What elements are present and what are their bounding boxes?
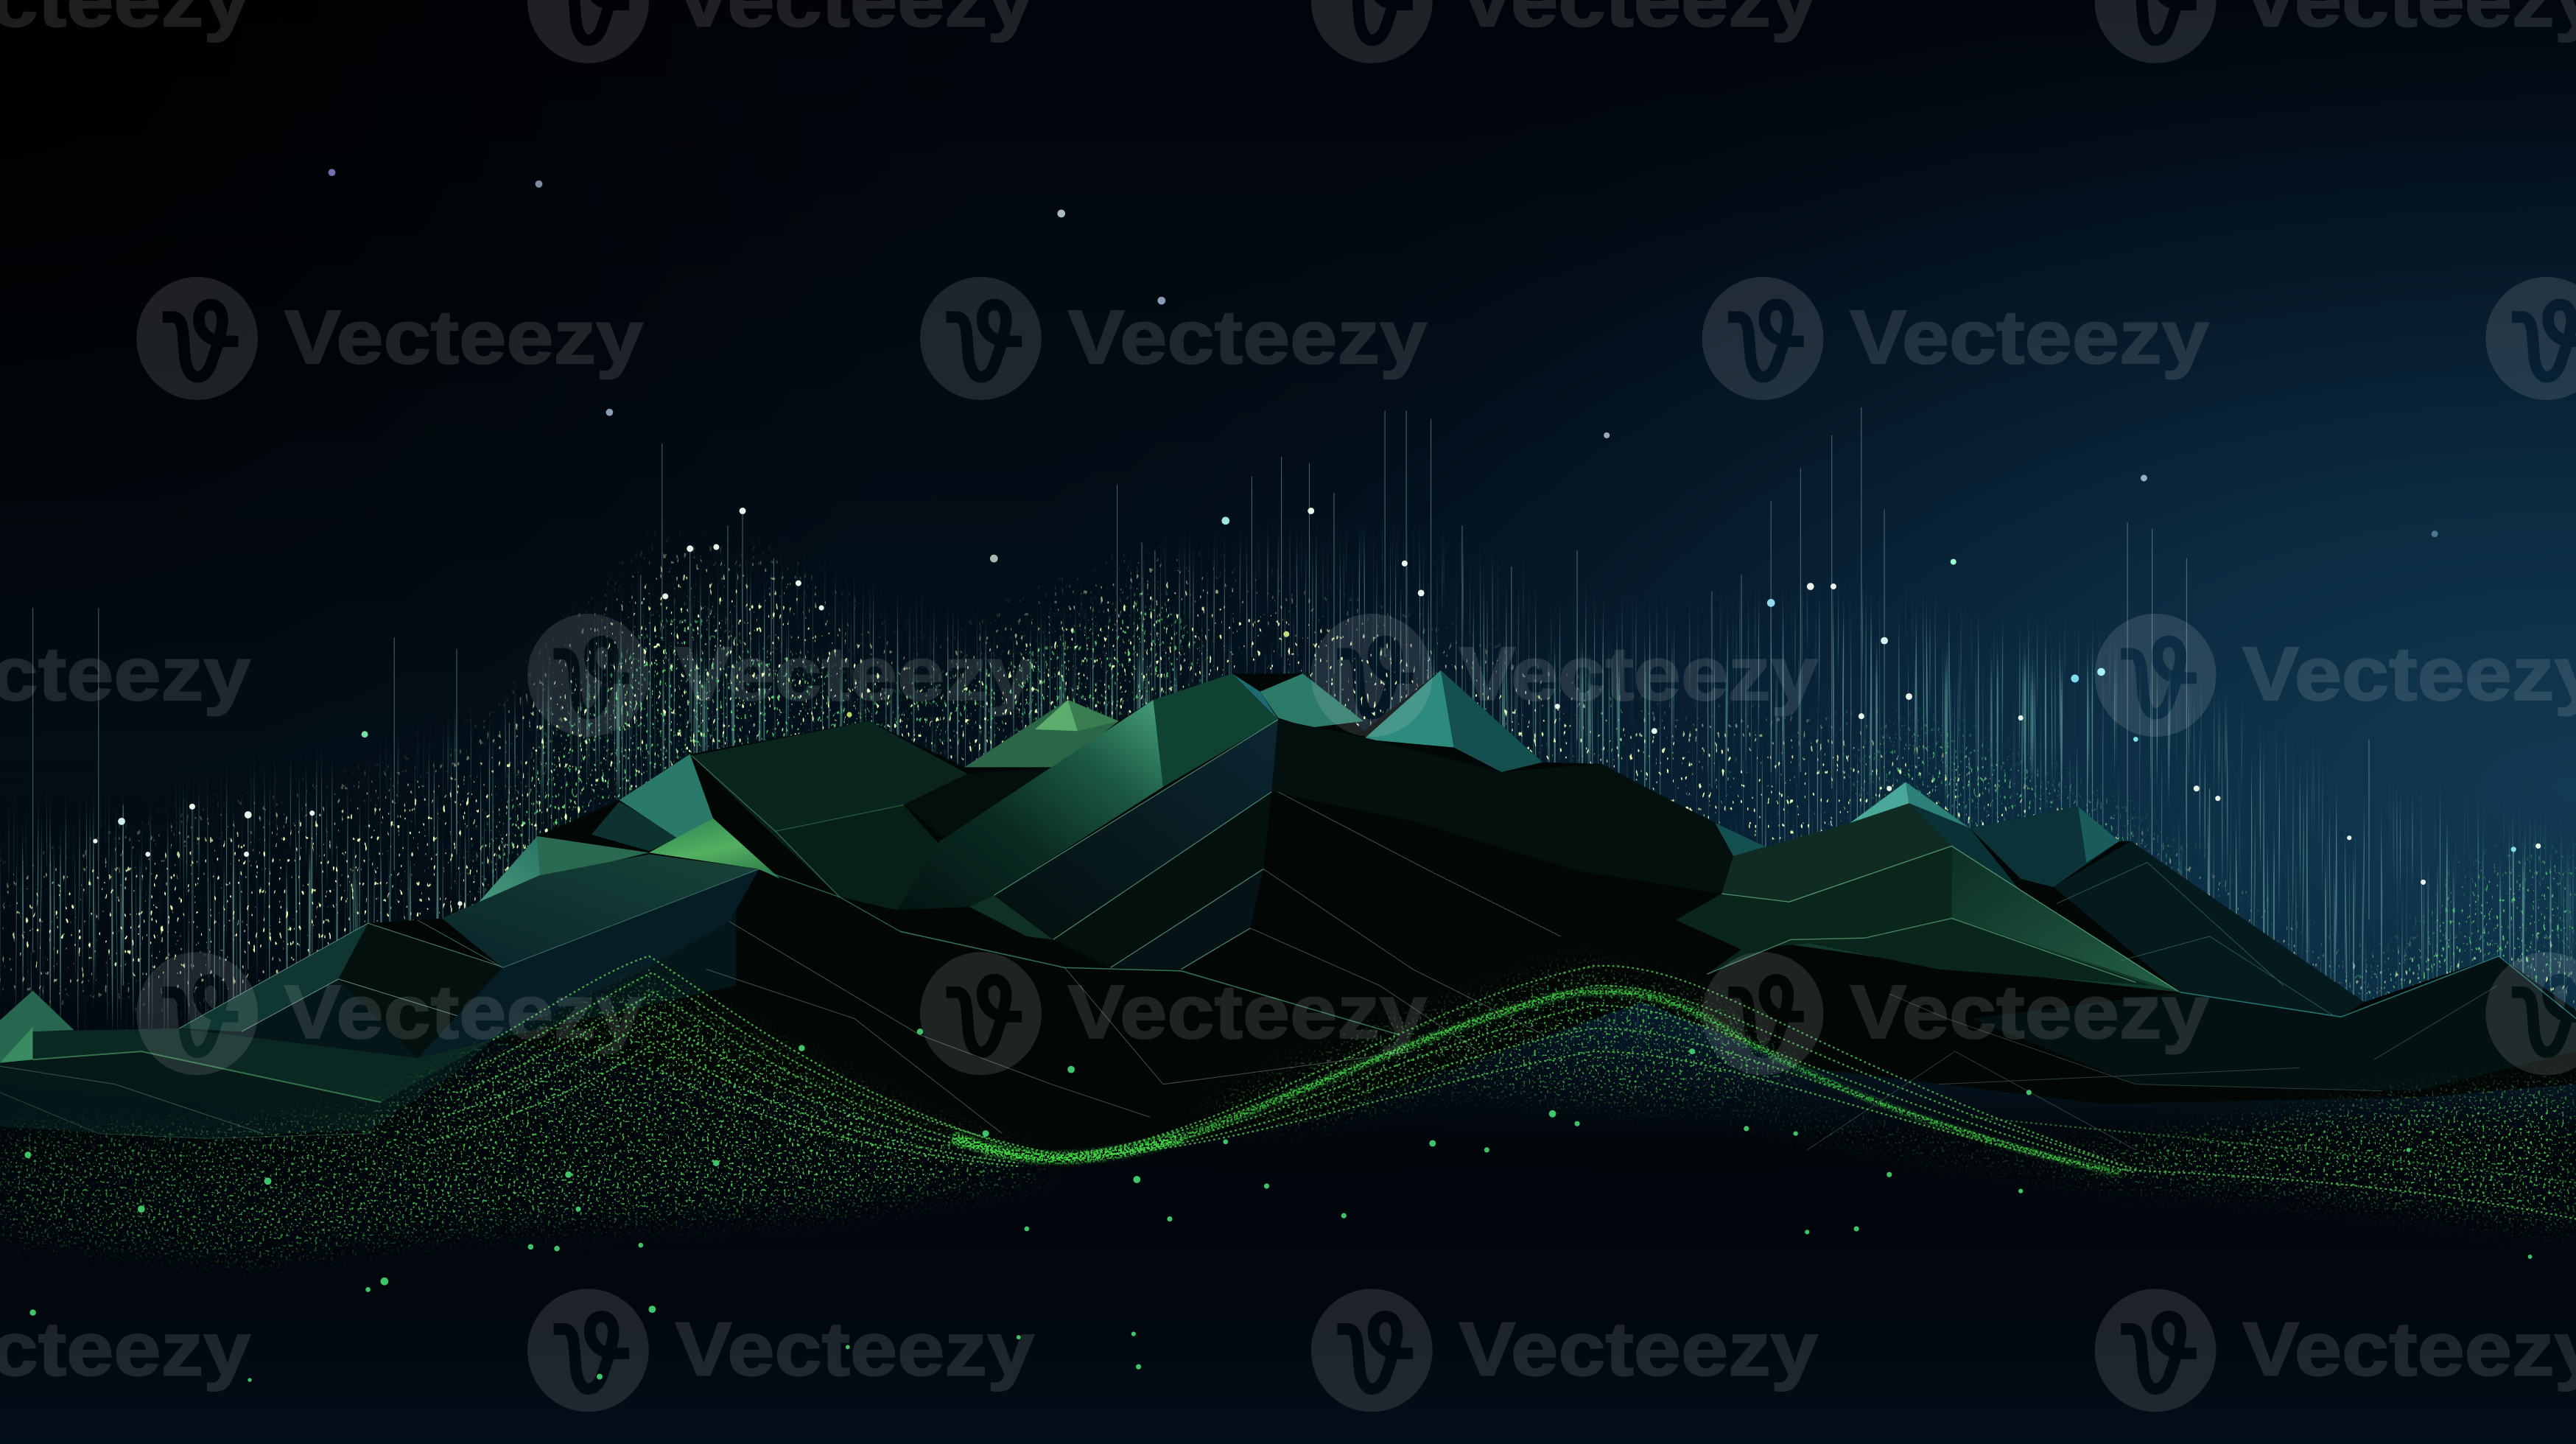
watermark row 2 (136, 277, 2576, 400)
vertical data streaks field (0, 407, 2576, 1018)
mountains (0, 670, 2576, 1170)
mountain: far left hill (0, 879, 736, 1138)
mountain: full silhouette backing (0, 670, 2576, 1170)
sky sparkle particles (0, 558, 2576, 1018)
watermark row 4 (136, 952, 2576, 1075)
watermark row 2: Vecteezy (284, 295, 643, 379)
mountain: central dark green peak (692, 721, 1058, 910)
mountain: teal and lime shards (592, 754, 780, 879)
mountain: big green peak (897, 670, 1543, 939)
watermark row 5: Vecteezy (675, 1306, 1034, 1391)
watermark row 3: Vecteezy (2242, 631, 2576, 716)
mountain: light green peak (964, 700, 1119, 767)
wave: bright green ribbon (953, 991, 2119, 1173)
wave: dotted rows, centre and right hump (1051, 966, 2576, 1219)
watermark row 2: Vecteezy (1068, 295, 1427, 379)
watermark row 5 (0, 1289, 2576, 1412)
watermark row 2: Vecteezy (1850, 295, 2209, 379)
green particle ground speckle (0, 970, 2576, 1257)
mountain: right green peak (1676, 782, 2180, 992)
sky dots (93, 169, 2541, 906)
watermark row 1 (0, 0, 2576, 63)
watermark row 3: Vecteezy (1459, 631, 1818, 716)
mountain: right dark ridges (1807, 841, 2576, 1150)
wave: dotted rows, left crest (427, 956, 1051, 1166)
watermark row 3: Vecteezy (675, 631, 1034, 716)
mountain: left teal peak and front face (417, 836, 759, 1058)
watermark row 3 (0, 614, 2576, 737)
watermark row 4: Vecteezy (284, 970, 643, 1054)
watermark row 4: Vecteezy (1068, 970, 1427, 1054)
watermark row 5: Vecteezy (1459, 1306, 1818, 1391)
watermark row 4: Vecteezy (1850, 970, 2209, 1054)
green ground dots (24, 1028, 2532, 1382)
watermark row 5: Vecteezy (2242, 1306, 2576, 1391)
mountain: front wedge with contour strips (706, 720, 1768, 1134)
